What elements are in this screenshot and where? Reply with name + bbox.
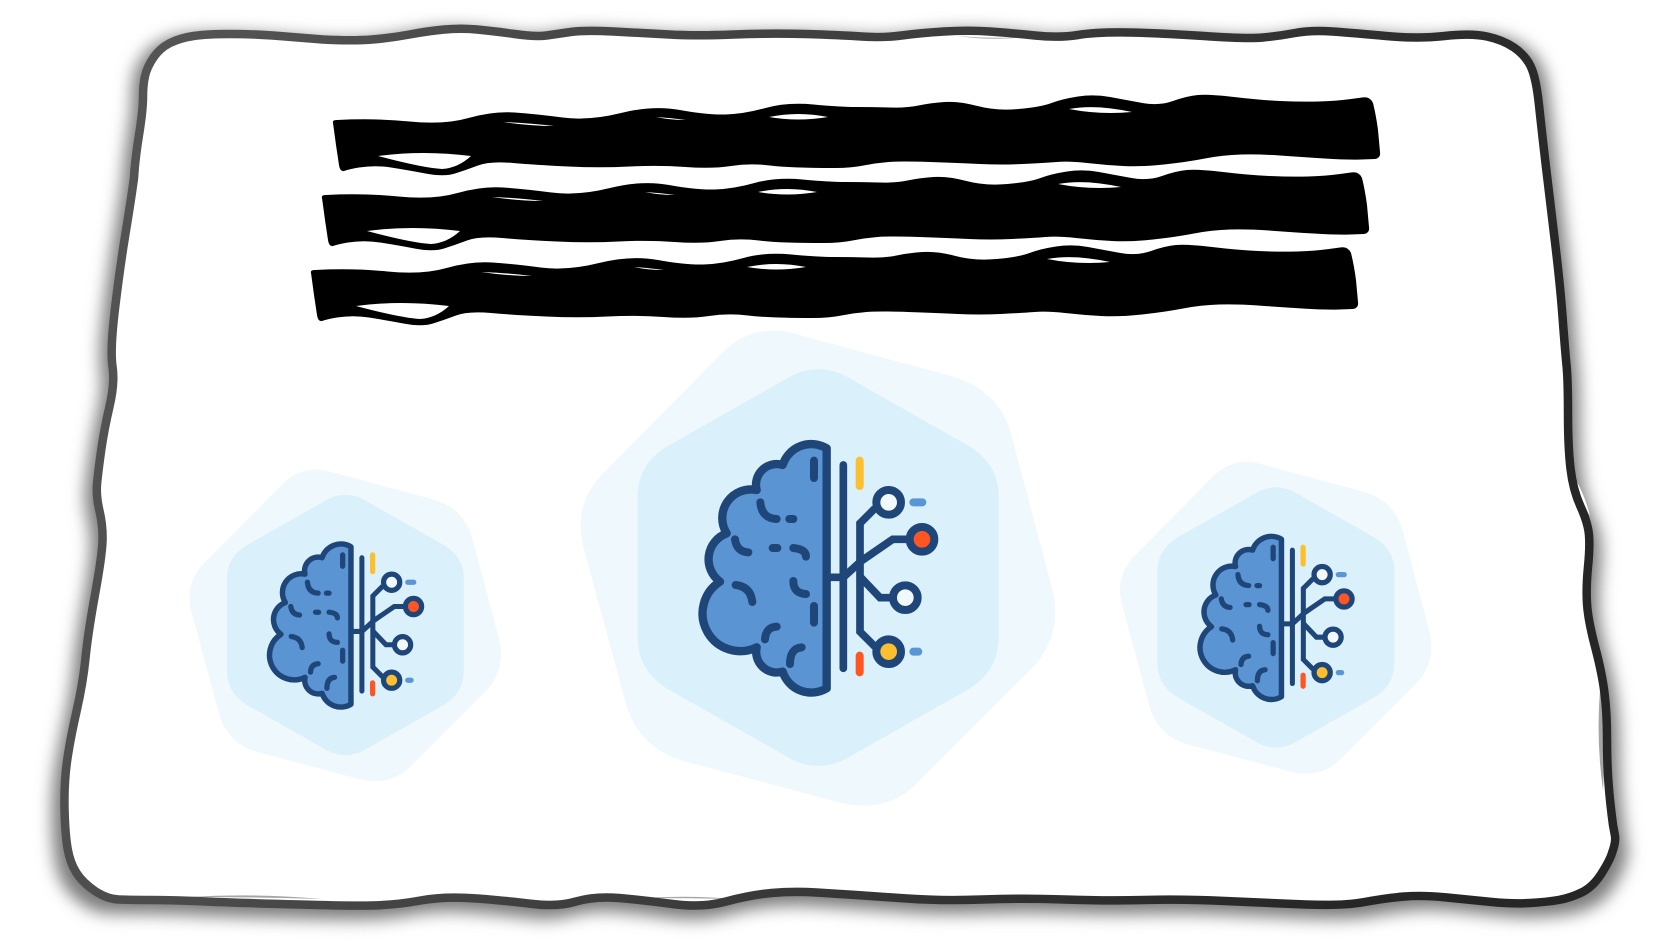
outer rotated hexagon bbox=[581, 330, 1055, 806]
circuit lines bbox=[830, 465, 910, 668]
icon: left brain circuit hexagon bbox=[190, 469, 501, 781]
icon: large brain circuit hexagon bbox=[581, 330, 1055, 806]
icon: right brain circuit hexagon bbox=[1120, 462, 1431, 774]
circuit nodes bbox=[876, 490, 934, 664]
accent bars bbox=[860, 461, 922, 672]
brain folds bbox=[735, 461, 814, 664]
scribble line 1 bbox=[333, 95, 1380, 175]
brain hemisphere bbox=[703, 444, 827, 693]
scribble line 3 bbox=[311, 245, 1358, 325]
scribble line 2 bbox=[322, 170, 1369, 250]
heading: redacted scribble lines bbox=[311, 95, 1380, 325]
inner hexagon bbox=[638, 369, 999, 766]
